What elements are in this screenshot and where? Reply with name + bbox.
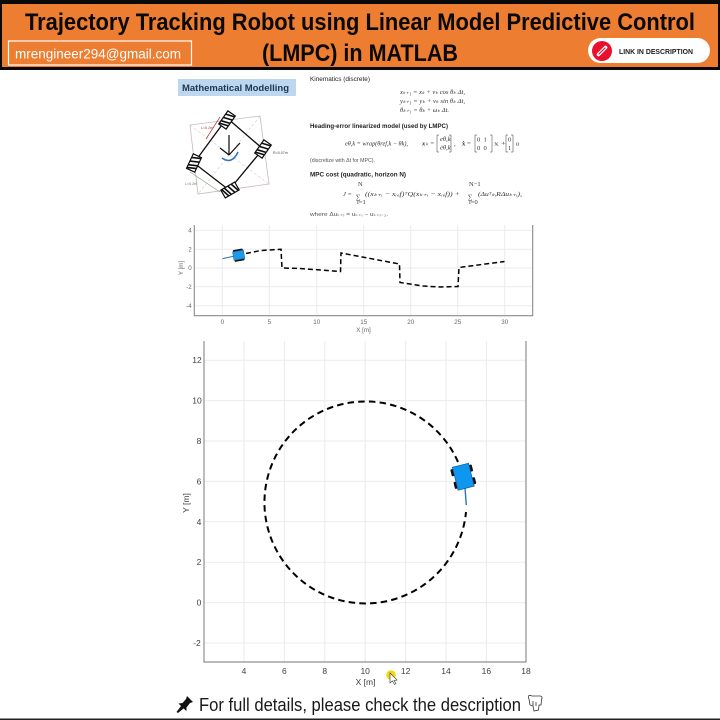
mpc cost: i=0 <box>469 199 478 206</box>
x tick labels: 10 <box>313 319 321 326</box>
heading-error model: x <box>421 140 426 148</box>
heading-error model: ėθ,k <box>440 144 451 152</box>
bottom edge <box>0 718 720 720</box>
axes <box>204 341 526 662</box>
mpc cost: where Δuₖ₊ᵢ = uₖ₊ᵢ − uₖ₊ᵢ₋₁. <box>310 212 388 218</box>
icon: link <box>592 41 612 61</box>
icon: pushpin <box>176 696 193 713</box>
heading-error model: ₖ = <box>426 140 434 148</box>
kinematics: xₖ₊₁ = xₖ + vₖ cos θₖ Δt, <box>399 89 465 96</box>
x tick labels: 15 <box>360 319 368 326</box>
kinematics: Kinematics (discrete) <box>310 76 370 83</box>
y tick labels: 2 <box>197 557 202 567</box>
x tick labels: X [m] <box>356 327 371 334</box>
reference path <box>246 249 504 287</box>
x tick labels: 20 <box>407 319 415 326</box>
y tick labels: 0 <box>197 598 202 608</box>
icon: mouse cursor highlight <box>386 670 397 684</box>
heading-error model: 1 <box>508 145 511 152</box>
x tick labels: 16 <box>482 666 491 676</box>
x tick labels: 12 <box>401 666 411 676</box>
y tick labels: 2 <box>188 246 192 254</box>
y tick labels: 8 <box>197 436 202 446</box>
kinematics <box>310 76 465 114</box>
mpc cost: N <box>358 181 363 188</box>
small trajectory chart <box>178 225 533 334</box>
y tick labels <box>181 355 202 648</box>
mpc cost: ∑ <box>468 194 473 201</box>
header banner <box>0 0 720 70</box>
heading-error model: Heading-error linearized model (used by LMPC) <box>310 123 448 130</box>
y tick labels: Y [m] <box>181 493 191 513</box>
title <box>25 9 695 67</box>
x tick labels: X [m] <box>356 677 375 687</box>
heading-error model: , <box>454 140 456 148</box>
heading-error model: eθ,k <box>440 136 451 143</box>
x tick labels <box>221 319 509 334</box>
heading-error model: x + <box>494 140 506 148</box>
mathematical modelling heading <box>178 79 296 96</box>
link in description badge: LINK IN DESCRIPTION <box>619 47 693 56</box>
y tick labels: 12 <box>192 355 202 365</box>
large circular trajectory chart <box>181 341 531 687</box>
y tick labels: -2 <box>193 638 201 648</box>
kinematics: θₖ₊₁ = θₖ + ωₖ Δt. <box>400 107 449 114</box>
heading-error model: 0 1 <box>477 136 487 144</box>
mpc cost: N−1 <box>469 181 481 188</box>
x tick labels: 30 <box>501 319 509 326</box>
y tick labels: -2 <box>186 284 192 291</box>
robot <box>450 463 477 491</box>
mpc cost <box>310 172 522 218</box>
x tick labels: 6 <box>282 666 287 676</box>
y tick labels: Y [m] <box>178 261 185 275</box>
email box <box>8 41 192 65</box>
y tick labels: 0 <box>188 265 192 272</box>
mpc cost: i=1 <box>357 199 366 206</box>
heading-error model: ẋ <box>462 140 466 148</box>
mpc cost: MPC cost (quadratic, horizon N) <box>310 172 406 178</box>
y tick labels: -4 <box>186 303 192 310</box>
robot <box>232 248 245 262</box>
heading-error model <box>310 123 520 164</box>
robot kinematics diagram <box>185 111 288 198</box>
grid <box>194 225 533 316</box>
y tick labels: 6 <box>197 476 202 486</box>
x tick labels: 10 <box>360 666 370 676</box>
footer note: For full details, please check the description <box>199 695 521 715</box>
robot trail <box>222 255 239 259</box>
y tick labels: 4 <box>197 517 202 527</box>
equations panel <box>310 76 522 218</box>
title: (LMPC) in MATLAB <box>262 40 458 67</box>
x tick labels <box>242 666 531 687</box>
axes <box>194 225 533 316</box>
heading-error model: 0 <box>508 136 511 144</box>
robot trail <box>465 488 466 505</box>
icon: pointing hand <box>528 695 542 711</box>
heading-error model: 0 0 <box>477 145 487 152</box>
mpc cost: (ΔuᵀₖᵢRΔuₖ₊ᵢ), <box>478 191 522 198</box>
heading-error model: u <box>516 140 520 148</box>
wheels <box>187 111 271 198</box>
x tick labels: 8 <box>322 666 327 676</box>
robot kinematics diagram: L=0.2m <box>185 182 197 186</box>
mpc cost: ((xₖ₊ᵢ − xᵣₑf)ᵀQ(xₖ₊ᵢ − xᵣₑf)) + <box>365 191 460 198</box>
kinematics: yₖ₊₁ = yₖ + vₖ sin θₖ Δt, <box>399 98 465 105</box>
email box: mrengineer294@gmail.com <box>15 46 181 62</box>
reference circle <box>264 401 466 603</box>
x tick labels: 0 <box>221 319 225 326</box>
grid <box>204 341 526 662</box>
mathematical modelling heading: Mathematical Modelling <box>182 83 289 94</box>
x tick labels: 14 <box>441 666 451 676</box>
x tick labels: 4 <box>242 666 247 676</box>
mpc cost: J = <box>343 191 352 198</box>
heading-error model: = <box>467 140 471 148</box>
x tick labels: 25 <box>454 319 462 326</box>
link in description badge <box>588 38 710 63</box>
robot kinematics diagram: R=0.07m <box>273 151 288 155</box>
y tick labels: 10 <box>192 396 202 406</box>
x tick labels: 18 <box>521 666 531 676</box>
heading-error model: (discretize with Δt for MPC). <box>310 158 375 164</box>
x tick labels: 5 <box>268 319 272 326</box>
heading-error model: eθ,k = wrap(θref,k − θk), <box>345 140 408 148</box>
y tick labels: 4 <box>188 228 192 234</box>
y tick labels <box>178 228 192 310</box>
robot kinematics diagram: L=0.2m <box>201 126 213 130</box>
mpc cost: ∑ <box>356 194 361 201</box>
